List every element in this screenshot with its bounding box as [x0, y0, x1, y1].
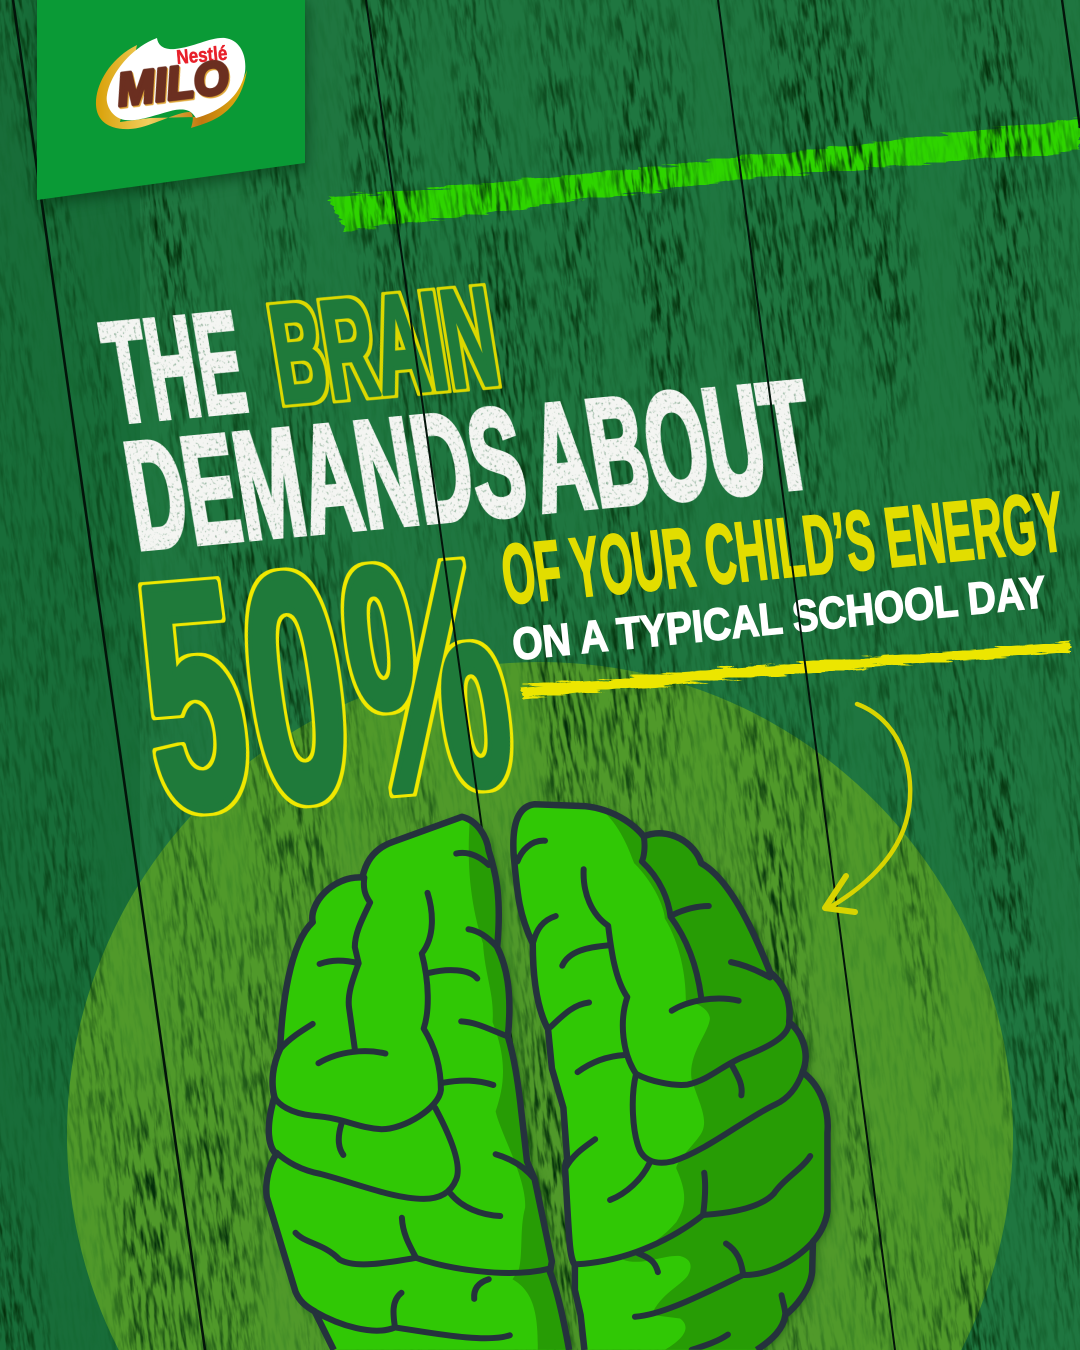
- logo word: Nestlé: Nestlé: [176, 43, 228, 69]
- yellow brush underline: [521, 642, 1070, 698]
- brain illustration: [266, 804, 837, 1350]
- light green brush stripe: [328, 119, 1080, 231]
- logo word: MILO: MILO: [114, 51, 232, 116]
- logo tag panel: [37, 0, 305, 200]
- curved arrow pointing to brain: [825, 704, 910, 912]
- big figure: 50%: 50%: [121, 492, 534, 878]
- headline: THE: THE: [93, 281, 255, 454]
- large green circle behind brain: [67, 662, 1013, 1350]
- logo white badge: [107, 38, 245, 120]
- right hemisphere: [513, 804, 837, 1350]
- logo swoosh: [96, 45, 247, 129]
- left hemisphere: [266, 811, 577, 1350]
- MILO logo: [96, 38, 247, 129]
- headline: BRAIN: BRAIN: [261, 258, 507, 433]
